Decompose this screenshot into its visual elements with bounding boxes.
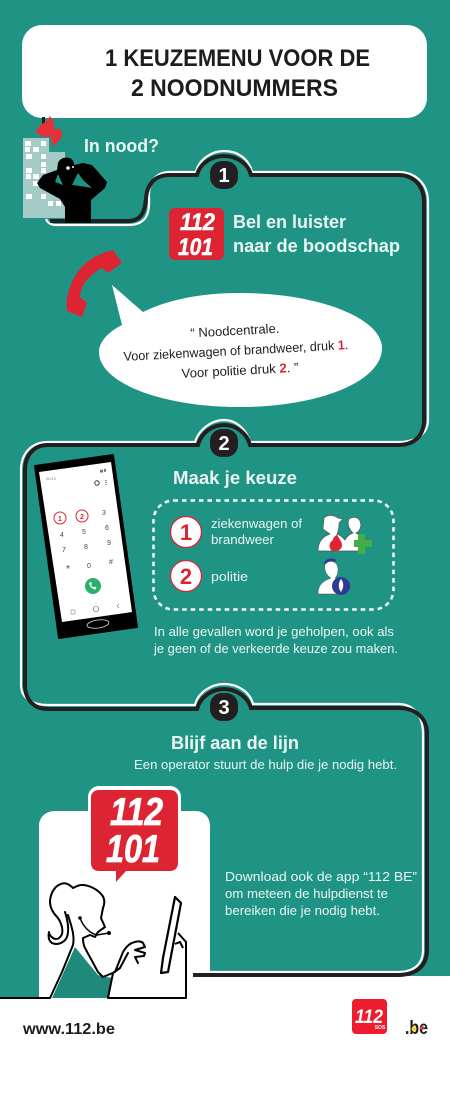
- route end over card: [193, 973, 212, 977]
- heading: step 1: [233, 212, 400, 256]
- badge: step 2: [210, 429, 238, 457]
- smartphone: 4: [60, 532, 64, 539]
- smartphone: #: [109, 559, 113, 566]
- choice 1 label: brandweer: [211, 532, 275, 547]
- speech bubble: “ Noodcentrale.: [190, 321, 280, 340]
- icon: firefighter and paramedic: [318, 515, 372, 554]
- speech bubble: 112 101: 101: [106, 828, 160, 871]
- choice 2 number: [170, 560, 202, 592]
- smartphone: [35, 455, 137, 638]
- route line: [21, 151, 428, 975]
- smartphone: 5: [82, 529, 86, 536]
- icon: burning building: [23, 116, 65, 218]
- choice 1 label: ziekenwagen of: [211, 516, 302, 531]
- choice 1 number: [170, 516, 202, 548]
- smartphone: 3: [102, 510, 106, 517]
- choice 1 label: [211, 516, 302, 547]
- speech bubble: [99, 285, 382, 407]
- smartphone: *: [66, 564, 70, 575]
- logo: 112 101 red: [169, 208, 224, 261]
- panel: choices: [154, 500, 394, 610]
- smartphone: 6: [105, 525, 109, 532]
- choice 2 number: 2: [180, 564, 192, 589]
- text: app download: om meteen de hulpdienst te: [225, 886, 388, 901]
- icon: red phone handset: [67, 250, 122, 317]
- text: reassurance note: [153, 624, 398, 656]
- smartphone: 9: [107, 540, 111, 547]
- smartphone: 20:12: [46, 476, 57, 481]
- logo: 112 SOS: 112: [355, 1007, 383, 1028]
- text: reassurance note: In alle gevallen word je geholpen, ook als: [154, 624, 394, 639]
- logo: .be: .be: [405, 1018, 428, 1039]
- badge: step 3: 3: [218, 697, 230, 719]
- badge: step 3: [210, 693, 238, 721]
- heading: in nood: In nood?: [84, 136, 159, 156]
- choice 2 label: politie: [211, 569, 248, 584]
- heading: step 2: Maak je keuze: [173, 468, 297, 488]
- title banner: 1 KEUZEMENU VOOR DE: [105, 45, 370, 72]
- title banner: 2 NOODNUMMERS: [131, 75, 338, 102]
- heading: step 1: Bel en luister: [233, 212, 346, 232]
- badge: step 1: [210, 161, 238, 189]
- logo: 112 SOS: [352, 999, 387, 1034]
- text: operator: Een operator stuurt de hulp die je nodig hebt.: [134, 757, 397, 772]
- text: app download: bereiken die je nodig hebt.: [225, 903, 380, 918]
- choice 1 number: 1: [180, 520, 192, 545]
- website url: www.112.be: [22, 1021, 115, 1038]
- text: app download: Download ook de app “112 BE”: [225, 869, 417, 884]
- text: reassurance note: je geen of de verkeerde keuze zou maken.: [153, 641, 398, 656]
- logo: 112 101 red: 112: [180, 209, 216, 236]
- icon: police officer: [318, 558, 350, 595]
- title banner: [22, 25, 427, 118]
- text: app download: [225, 869, 417, 918]
- logo: 112 SOS: SOS: [375, 1025, 386, 1031]
- badge: step 1: 1: [218, 165, 230, 187]
- speech bubble: 112 101: 112: [110, 791, 163, 834]
- smartphone: 8: [84, 544, 88, 551]
- icon: panicking person: [37, 158, 107, 223]
- speech bubble: 112 101: [88, 786, 181, 882]
- smartphone: 0: [87, 563, 91, 570]
- heading: step 3: Blijf aan de lijn: [171, 733, 299, 753]
- panel: operator card: [39, 811, 210, 998]
- smartphone: 2: [80, 514, 84, 521]
- heading: step 1: naar de boodschap: [233, 236, 400, 256]
- smartphone: 1: [58, 516, 62, 523]
- smartphone: 7: [62, 547, 66, 554]
- logo: 112 101 red: 101: [178, 234, 213, 261]
- illustration: operator woman at desk: [0, 883, 186, 998]
- badge: step 2: 2: [218, 433, 230, 455]
- speech bubble: Voor ziekenwagen of brandweer, druk 1.: [123, 337, 349, 364]
- speech bubble: Voor politie druk 2. ”: [181, 360, 299, 381]
